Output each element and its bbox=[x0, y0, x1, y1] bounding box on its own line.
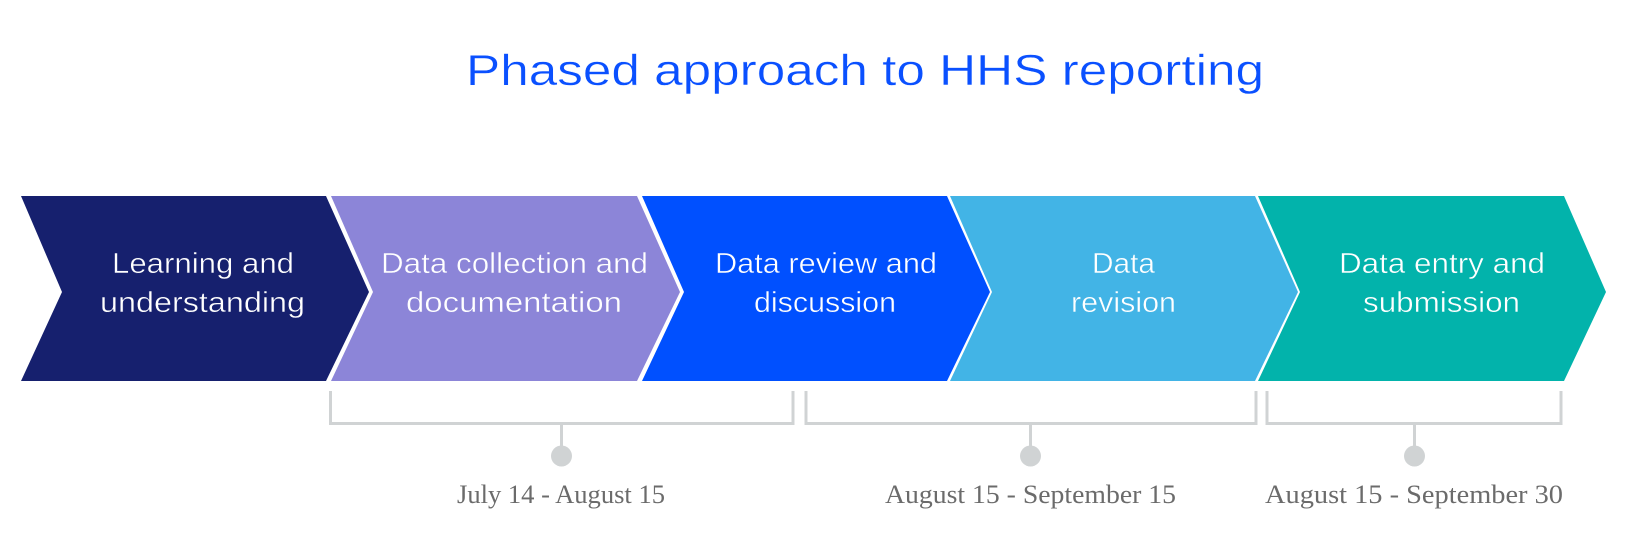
timeline bracket: August 15 - September 30: August 15 - September 30 bbox=[1265, 480, 1563, 509]
chevron: data entry and submission bbox=[1258, 196, 1606, 381]
timeline bracket: July 14 - August 15: July 14 - August 15 bbox=[457, 480, 665, 509]
chevron: data revision: Data bbox=[1092, 248, 1155, 280]
timeline bracket: July 14 - August 15 bbox=[330, 391, 793, 509]
chevron: data collection and documentation: Data collection and bbox=[381, 248, 648, 280]
chevron: data revision: revision bbox=[1071, 287, 1176, 319]
timeline bracket: August 15 - September 15 bbox=[806, 391, 1256, 509]
chevron: data entry and submission: submission bbox=[1363, 287, 1520, 319]
chevron: learning and understanding: Learning and bbox=[112, 248, 294, 280]
timeline bracket: August 15 - September 30 bbox=[1265, 391, 1563, 509]
chevron: learning and understanding bbox=[21, 196, 369, 381]
chevron: data collection and documentation bbox=[331, 196, 680, 381]
chevron: data collection and documentation: documentation bbox=[406, 287, 622, 319]
chevron: data entry and submission: Data entry and bbox=[1339, 248, 1545, 280]
timeline bracket: August 15 - September 15: August 15 - September 15 bbox=[885, 480, 1176, 509]
chevron: data review and discussion: Data review and bbox=[715, 248, 937, 280]
chevron: data review and discussion bbox=[642, 196, 990, 381]
chevron: data revision bbox=[950, 196, 1298, 381]
title: Phased approach to HHS reporting bbox=[466, 46, 1264, 95]
chevron: data review and discussion: discussion bbox=[754, 287, 896, 319]
chevron: learning and understanding: understanding bbox=[100, 287, 305, 319]
